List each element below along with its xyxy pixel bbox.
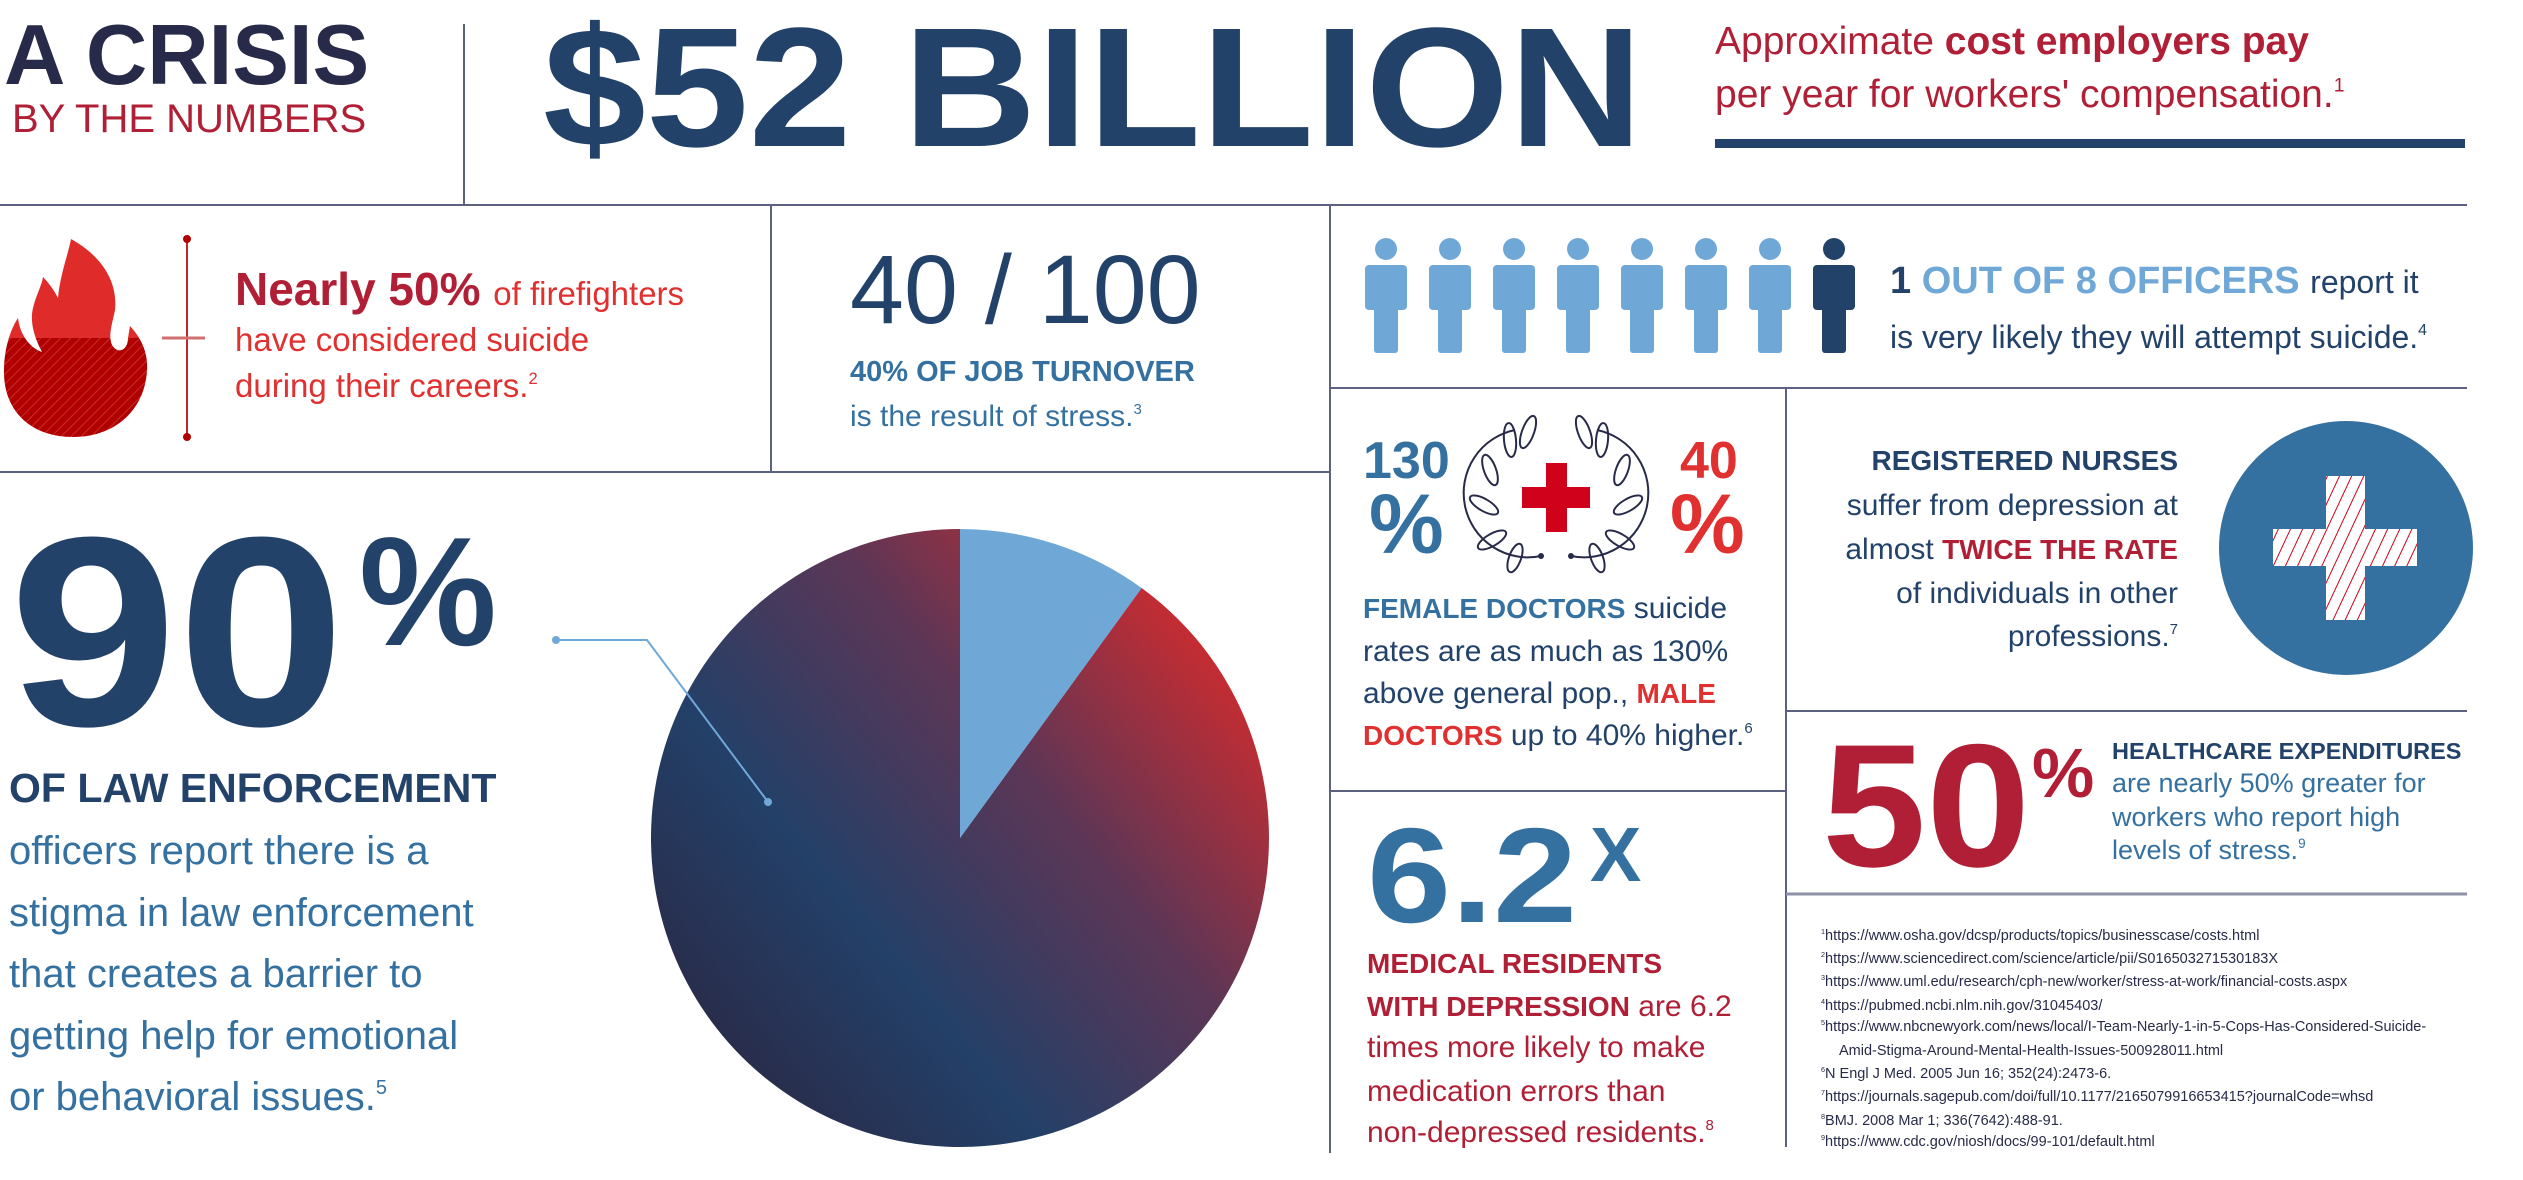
text: registered nurses: REGISTERED NURSES [1872,445,2178,476]
footnotes: 8BMJ. 2008 Mar 1; 336(7642):488-91. [1821,1112,2063,1129]
footnotes: 9https://www.cdc.gov/niosh/docs/99-101/default.html [1821,1133,2155,1150]
stat: 40%: % [1670,477,1745,571]
headline caption [1715,20,2345,116]
text: healthcare expenditures: levels of stress.9 [2112,835,2306,865]
headline caption: Approximate cost employers pay [1715,20,2309,63]
text: law enforcement [9,765,496,1119]
footnotes: 3https://www.uml.edu/research/cph-new/worker/stress-at-work/financial-costs.aspx [1821,973,2347,990]
text: registered nurses: suffer from depression at [1847,489,2178,522]
caption underline bar [1715,139,2465,148]
text: job turnover [850,356,1195,433]
stat: 90% [9,482,497,783]
footnotes: 4https://pubmed.ncbi.nlm.nih.gov/31045403/ [1821,997,2102,1014]
stat: 130%: % [1369,477,1444,571]
text: law enforcement: OF LAW ENFORCEMENT [9,765,496,811]
text: registered nurses [1845,445,2178,653]
text: doctors: DOCTORS up to 40% higher.6 [1363,719,1753,752]
stat: 6.2x: X [1590,812,1641,898]
callout line [556,640,768,802]
text: registered nurses: of individuals in other [1896,577,2178,610]
text: firefighters stat: Nearly 50% of firefighters [235,263,684,315]
headline caption: per year for workers' compensation.1 [1715,73,2345,116]
text: law enforcement: that creates a barrier to [9,952,423,996]
text: law enforcement: or behavioral issues.5 [9,1075,387,1119]
text: doctors: FEMALE DOCTORS suicide [1363,592,1727,625]
text: firefighters stat: during their careers.2 [235,367,538,404]
text: healthcare expenditures: HEALTHCARE EXPENDITURES [2112,738,2461,764]
footnotes: 1https://www.osha.gov/dcsp/products/topics/businesscase/costs.html [1821,927,2259,944]
stat: 6.2x: 6.2 [1367,800,1577,951]
text: healthcare expenditures: are nearly 50% greater for [2112,768,2426,798]
text: registered nurses: almost TWICE THE RATE [1845,533,2178,566]
icon: laurel with red cross [1462,415,1650,574]
stat: 40%: 40 [1680,432,1738,490]
text: officers stat [1890,260,2427,355]
text: medical residents: MEDICAL RESIDENTS [1367,948,1662,979]
stat: 90%: % [359,505,497,678]
text: law enforcement: stigma in law enforcement [9,891,474,935]
text: law enforcement: getting help for emotional [9,1014,458,1058]
stat: 40% [1670,432,1745,571]
text: medical residents: non-depressed residents.8 [1367,1116,1714,1149]
icon: 8 officers pictogram [1365,238,1855,353]
text: doctors: rates are as much as 130% [1363,635,1728,668]
text: healthcare expenditures [2112,738,2461,865]
text: doctors [1363,592,1753,752]
text: medical residents [1367,948,1732,1149]
footnotes [1821,927,2426,1150]
text: law enforcement: officers report there is a [9,829,428,873]
text: officers stat: is very likely they will attempt suicide.4 [1890,319,2427,355]
text: job turnover: is the result of stress.3 [850,400,1142,433]
pie chart: 90% vs 10% [552,529,1269,1147]
text: job turnover: 40% OF JOB TURNOVER [850,356,1195,388]
text: firefighters stat [235,263,684,404]
footnotes: Amid-Stigma-Around-Mental-Health-Issues-500928011.html [1839,1043,2223,1059]
text: healthcare expenditures: workers who report high [2112,802,2400,832]
text: medical residents: WITH DEPRESSION are 6.2 [1367,990,1732,1023]
footnotes: 2https://www.sciencedirect.com/science/article/pii/S016503271530183X [1821,950,2278,967]
icon: nurse circle with hatched cross [2219,421,2473,675]
stat: 130% [1363,432,1450,571]
icon: flame [4,235,205,441]
stat: 50%: 50 [1822,709,2030,904]
text: registered nurses: professions.7 [2008,620,2178,653]
subtitle: by the numbers: BY THE NUMBERS [12,97,366,141]
stat: 50%: % [2032,734,2094,812]
text: officers stat: 1 OUT OF 8 OFFICERS report it [1890,260,2419,302]
footnotes: 5https://www.nbcnewyork.com/news/local/I-Team-Nearly-1-in-5-Cops-Has-Considered-Suicide- [1821,1018,2426,1035]
footnotes: 7https://journals.sagepub.com/doi/full/10.1177/2165079916653415?journalCode=whsd [1821,1088,2373,1105]
footnotes: 6N Engl J Med. 2005 Jun 16; 352(24):2473-6. [1821,1065,2111,1082]
stat: 90%: 90 [9,482,345,783]
stat: 40/100: 40 / 100 [850,235,1201,344]
title: A CRISIS: A CRISIS [4,8,369,103]
text: firefighters stat: have considered suicide [235,321,589,358]
text: doctors: above general pop., MALE [1363,677,1716,710]
stat: 130%: 130 [1363,432,1450,490]
text: medical residents: times more likely to make [1367,1031,1705,1064]
text: medical residents: medication errors than [1367,1075,1665,1108]
